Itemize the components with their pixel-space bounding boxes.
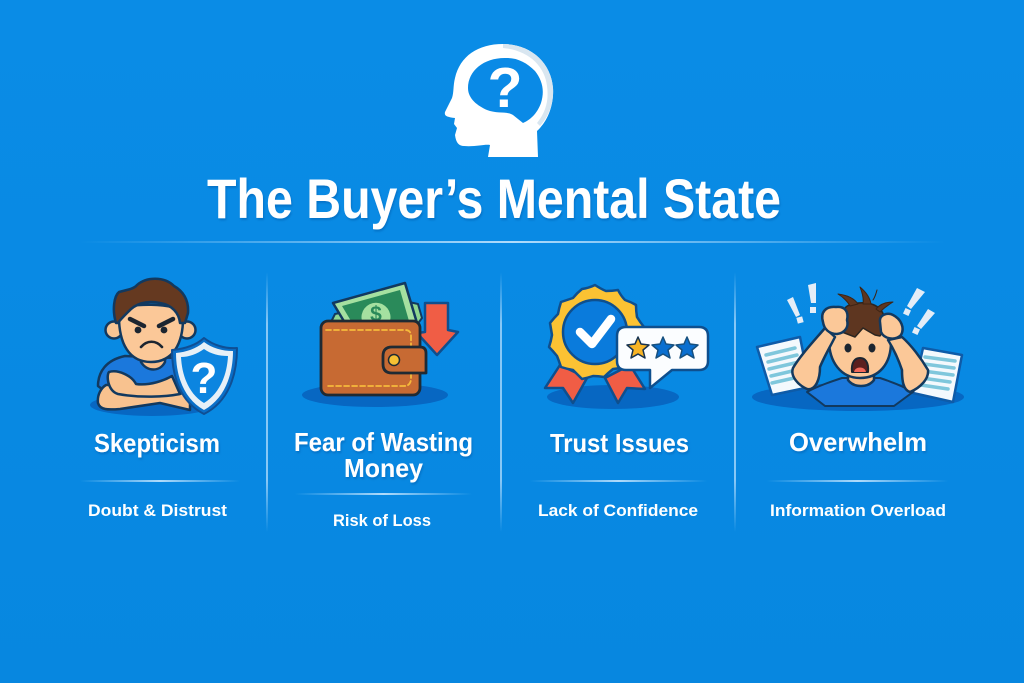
subtext: Information Overload: Information Overload [770,501,946,520]
title: The Buyer’s Mental State [207,167,781,230]
panel: trust issues [530,285,708,520]
heading: Overwhelm: Overwhelm [789,427,927,457]
heading: Skepticism: Skepticism [94,428,220,458]
panel: skepticism [80,279,240,520]
icon: award badge with star rating bubble [545,285,708,409]
subtext: Lack of Confidence: Lack of Confidence [538,501,698,520]
panel: overwhelm [752,283,964,520]
heading: Fear of Wasting Money [294,427,473,483]
icon: skeptical person with shield [90,279,237,416]
icon: skeptical person with shield: ? [191,354,217,403]
icon: wallet with money and down arrow: $ [370,303,382,326]
icon: head with question mark: ? [488,56,522,120]
heading: Fear of Wasting Money: Money [344,453,424,483]
icon: wallet with money and down arrow [302,283,458,407]
icon: overwhelmed person with papers [752,283,964,411]
panel: fear of wasting money [294,283,473,530]
heading: Trust Issues: Trust Issues [550,428,689,458]
icon: head with question mark [445,44,553,157]
subtext: Doubt & Distrust: Doubt & Distrust [88,501,227,520]
subtext: Risk of Loss: Risk of Loss [333,511,431,530]
heading: Fear of Wasting Money: Fear of Wasting [294,427,473,457]
